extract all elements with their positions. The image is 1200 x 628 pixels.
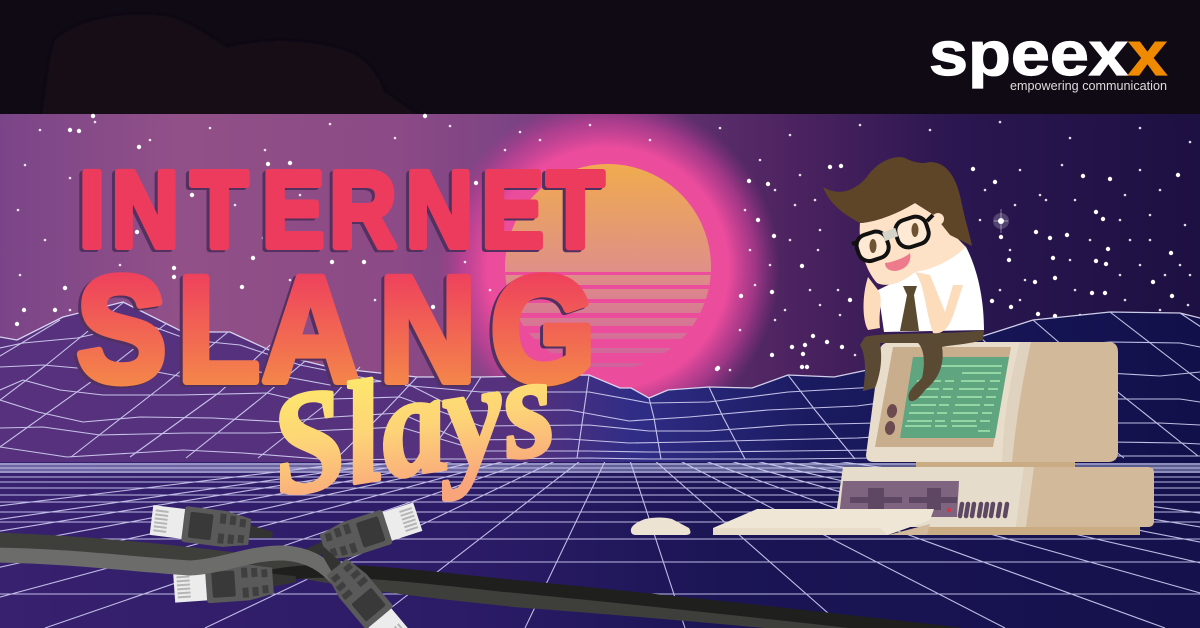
- wireframe floor grid: [0, 462, 1200, 628]
- cable: black: [272, 571, 960, 628]
- shirt: [878, 247, 984, 332]
- keyboard: [713, 509, 934, 535]
- title: Slays script: Slays: [260, 324, 565, 527]
- decorative dark clouds: [56, 17, 384, 94]
- legs: [860, 330, 984, 401]
- left arm: [864, 277, 881, 330]
- green screen: [900, 357, 1009, 438]
- computer monitor: [866, 342, 1118, 462]
- vintage computer: [631, 342, 1154, 535]
- ear: [932, 213, 944, 225]
- plug: lower left: [173, 561, 297, 606]
- right arm: [915, 272, 963, 333]
- tie: [900, 286, 919, 331]
- tagline: empowering communication: [1010, 79, 1167, 93]
- panel: purple night sky: [0, 114, 1200, 474]
- mouth: [885, 253, 910, 271]
- cable: grey looped: [0, 553, 340, 582]
- horizon haze: [0, 463, 1200, 473]
- title: INTERNET: INTERNET: [79, 150, 604, 270]
- drive panel: [839, 481, 959, 517]
- logo: speexx: [929, 20, 1168, 93]
- computer base: [834, 460, 1154, 535]
- sun glow: [436, 96, 780, 440]
- wireframe mountains: [0, 302, 1200, 470]
- plug: lower right: [308, 538, 414, 628]
- vents: [960, 504, 1007, 516]
- plug: upper right: [296, 499, 423, 571]
- starfield: [17, 116, 1190, 370]
- sun with stripes: [500, 164, 720, 375]
- title: INTERNET: INTERNET: [76, 152, 601, 272]
- glasses: [852, 214, 933, 264]
- panel: dark top band: [56, 17, 680, 114]
- title: SLANG: SLANG: [77, 246, 596, 414]
- bright star: [993, 209, 1009, 233]
- face: [860, 203, 966, 285]
- hair: [823, 157, 972, 246]
- plug: upper left: [149, 502, 275, 553]
- title: SLANG: SLANG: [74, 248, 593, 416]
- mouse: [631, 518, 690, 535]
- wordmark: speex x: [929, 20, 1168, 89]
- network cables and plugs: [0, 499, 960, 628]
- character: man with glasses sitting on computer: [823, 157, 984, 401]
- cable: dark grey: [0, 540, 960, 628]
